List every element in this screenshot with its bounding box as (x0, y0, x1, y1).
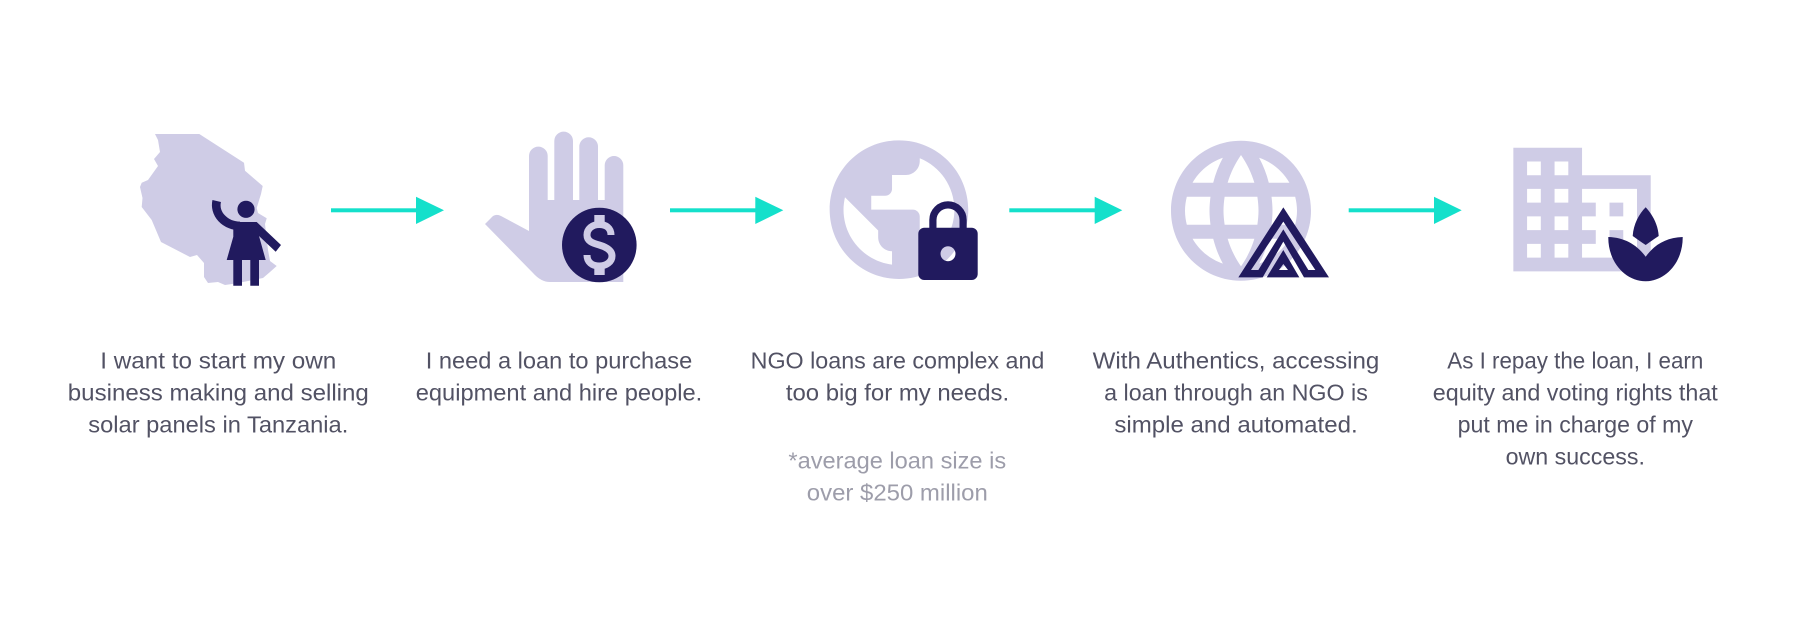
text: step 5 (1433, 348, 1718, 470)
text: step 3: too big for my needs. (786, 380, 1009, 406)
step 3: NGO loans (751, 140, 1044, 505)
text: step 5: equity and voting rights that (1433, 380, 1718, 406)
text: step 4: a loan through an NGO is (1104, 380, 1368, 406)
footnote: average loan size: *average loan size is (788, 447, 1006, 473)
text: step 4 (1093, 348, 1379, 438)
arrow 2 (670, 197, 783, 224)
arrow 3 (1009, 197, 1122, 224)
text: step 5: As I repay the loan, I earn (1447, 348, 1703, 374)
step 2: loan need (416, 132, 702, 406)
step 5: ownership (1433, 148, 1718, 470)
text: step 2: equipment and hire people. (416, 380, 702, 406)
icon: language globe (1171, 141, 1311, 281)
footnote: average loan size (788, 447, 1006, 505)
text: step 1: I want to start my own (100, 348, 336, 374)
text: step 1: business making and selling (68, 380, 369, 406)
text: step 1 (68, 348, 369, 438)
text: step 5: put me in charge of my (1458, 412, 1693, 438)
icon: padlock (918, 205, 978, 280)
text: step 2: I need a loan to purchase (426, 348, 692, 374)
text: step 3: NGO loans are complex and (751, 348, 1044, 374)
icon: raised hand (485, 132, 623, 282)
icon: lotus (1608, 207, 1683, 281)
text: step 2 (416, 348, 702, 406)
arrow 4 (1349, 197, 1462, 224)
icon: building (1513, 148, 1651, 271)
text: step 4: simple and automated. (1114, 412, 1358, 438)
icon: globe (830, 140, 968, 279)
arrow 1 (331, 197, 444, 224)
step 1: Tanzania entrepreneur (68, 134, 369, 438)
icon: map of Tanzania (140, 134, 277, 285)
footnote: average loan size: over $250 million (807, 479, 988, 505)
text: step 5: own success. (1506, 444, 1645, 470)
text: step 1: solar panels in Tanzania. (88, 412, 348, 438)
icon: waving woman (216, 201, 281, 286)
text: step 3 (751, 348, 1044, 406)
icon: Authentics logo (1238, 207, 1329, 277)
step 4: Authentics (1093, 141, 1379, 437)
text: step 4: With Authentics, accessing (1093, 348, 1379, 374)
icon: dollar coin (562, 208, 637, 282)
